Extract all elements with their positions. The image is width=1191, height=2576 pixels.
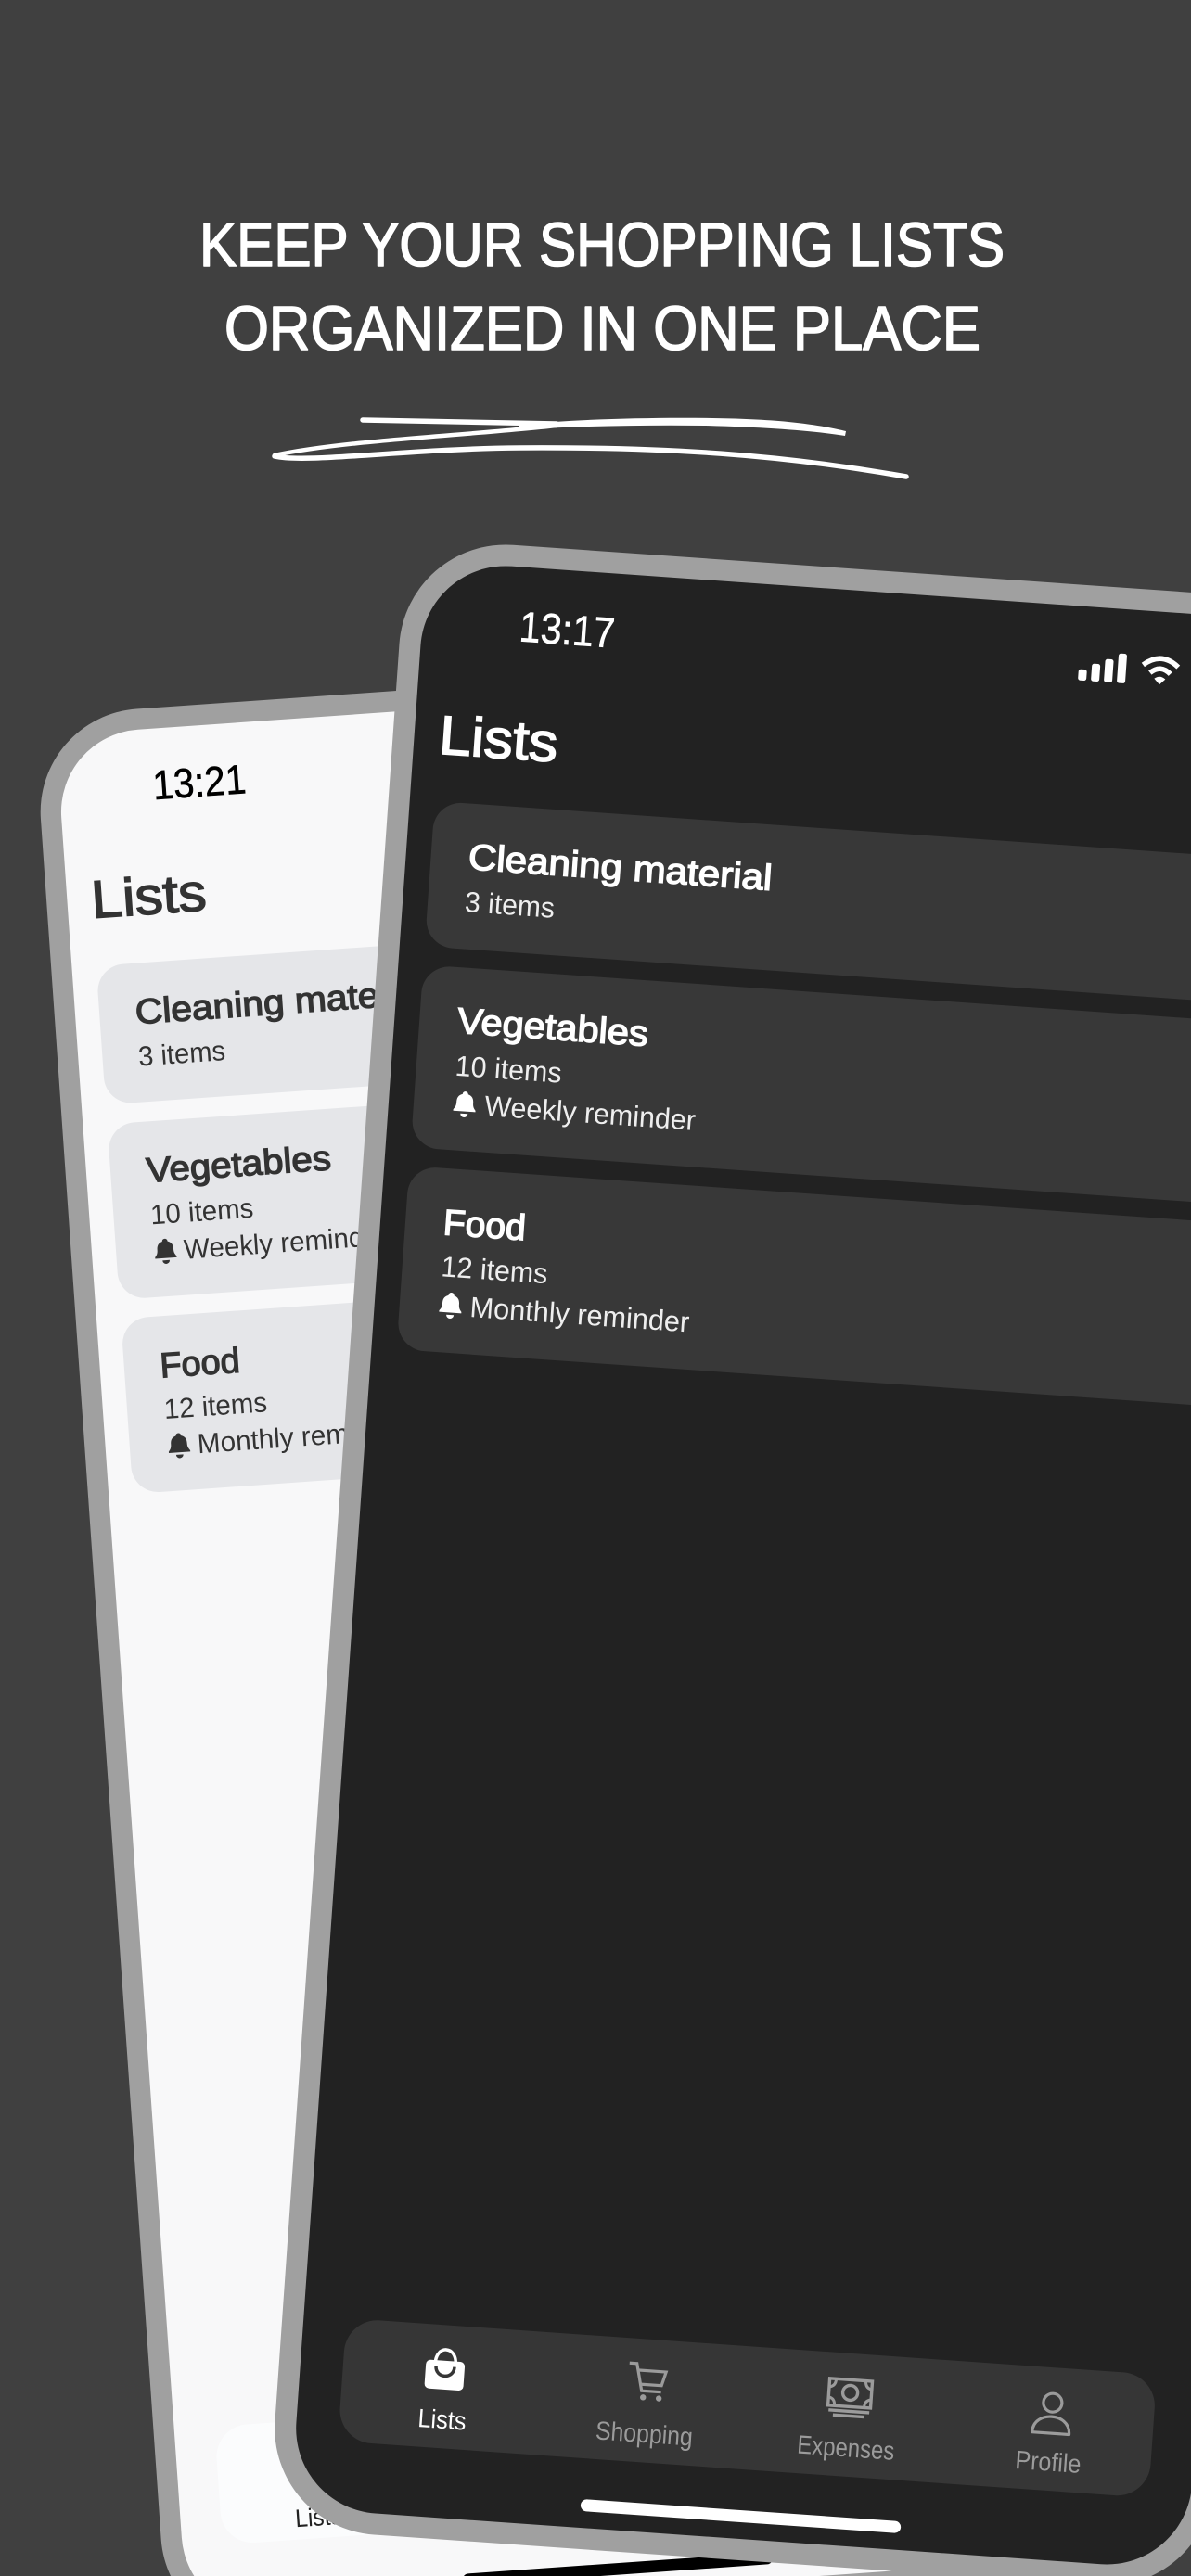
light tab bar: Lists [294, 2501, 343, 2532]
tab: expenses [796, 2377, 899, 2466]
title: ORGANIZED IN ONE PLACE [224, 294, 980, 363]
tab: profile [1015, 2391, 1086, 2479]
status bar time: 13:21 [151, 757, 248, 809]
list card: cleaning material: Cleaning material [467, 837, 774, 899]
list card: vegetables [411, 964, 1191, 1206]
dark phone frame [267, 538, 1191, 2576]
list card: vegetables: 10 items [455, 1050, 563, 1090]
phone: light mode (back) [33, 653, 1073, 2576]
list card: vegetables: Vegetables [456, 1001, 649, 1054]
list card: food: 12 items [441, 1250, 549, 1290]
list card: vegetables: Weekly reminder [483, 1090, 697, 1137]
list card: cleaning material [425, 801, 1191, 1005]
screen heading: Lists [89, 863, 208, 930]
list card: food: 12 items [163, 1387, 268, 1425]
list card: food [121, 1262, 950, 1494]
light phone screen [56, 675, 1051, 2576]
list card: vegetables: Weekly reminder [183, 1220, 390, 1266]
tab: expenses: Expenses [796, 2430, 895, 2466]
dark phone screen [290, 560, 1191, 2570]
icon: signal bars [1078, 651, 1127, 683]
list card: food [396, 1166, 1191, 1409]
light tab bar [214, 2372, 1005, 2544]
light phone frame [33, 653, 1073, 2576]
tab: lists [417, 2348, 471, 2436]
icon: wifi [1142, 657, 1179, 686]
list card: cleaning material: Cleaning material [134, 972, 430, 1031]
list card: food: Monthly reminder [197, 1414, 411, 1460]
title: KEEP YOUR SHOPPING LISTS [199, 210, 1005, 280]
hand drawn underline [275, 418, 906, 477]
light home indicator [462, 2552, 773, 2576]
list card: vegetables: Vegetables [145, 1138, 332, 1190]
phone: dark mode (front) [267, 538, 1191, 2576]
tab bar [338, 2318, 1157, 2498]
home indicator [580, 2499, 902, 2533]
list card: cleaning material [96, 909, 923, 1104]
screen heading: Lists [437, 705, 560, 774]
list card: cleaning material: 3 items [464, 886, 556, 925]
tab: shopping [595, 2361, 698, 2452]
list card: food: Food [159, 1341, 241, 1385]
tab: shopping: Shopping [595, 2416, 694, 2452]
list card: vegetables [107, 1067, 936, 1300]
title [199, 210, 1005, 363]
tab: lists: Lists [417, 2404, 467, 2436]
list card: food: Food [442, 1203, 527, 1248]
list card: cleaning material: 3 items [137, 1036, 226, 1073]
tab: profile: Profile [1015, 2445, 1082, 2479]
list card: food: Monthly reminder [469, 1291, 690, 1338]
list card: vegetables: 10 items [149, 1193, 254, 1231]
status bar time: 13:17 [518, 602, 617, 657]
